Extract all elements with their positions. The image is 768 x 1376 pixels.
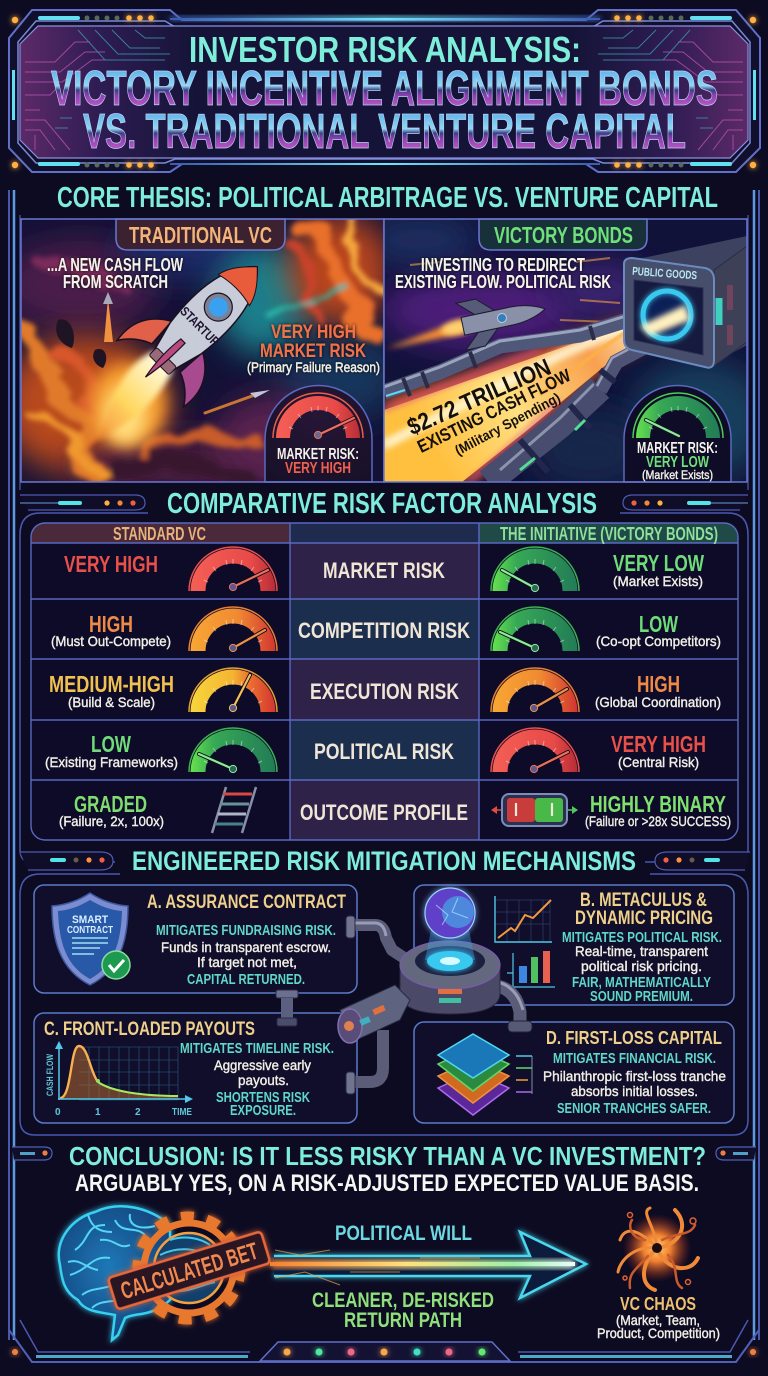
flow label: $2.72 TRILLION	[403, 354, 555, 441]
row: outcome profile: HIGHLY BINARY	[590, 791, 726, 817]
icon: brain and gear	[59, 1206, 270, 1340]
callout: very high market risk: VERY HIGH	[271, 322, 356, 343]
row: political risk: (Existing Frameworks)	[45, 754, 178, 770]
crystal globe	[425, 888, 475, 938]
chart: cash flow over time: CASH FLOW	[45, 1054, 56, 1096]
card A: assurance contract: If target not met,	[197, 954, 297, 970]
heading: engineered risk mitigation: ENGINEERED RISK MITIGATION MECHANISMS	[132, 846, 636, 876]
central machine with pipes	[276, 888, 532, 1094]
icon: VC chaos swirl	[618, 1208, 698, 1290]
label: VC chaos: Product, Competition)	[597, 1325, 720, 1341]
row: competition risk: LOW	[639, 611, 678, 637]
card C: front-loaded payouts	[34, 1013, 357, 1123]
row: political risk: (Central Risk)	[618, 754, 699, 770]
row: market risk: VERY LOW	[613, 550, 704, 576]
small rocket	[386, 298, 546, 352]
panel: traditional VC	[20, 218, 385, 483]
card C: front-loaded payouts: payouts.	[238, 1072, 289, 1088]
panel: victory bonds: PUBLIC GOODS	[632, 266, 698, 282]
row: execution risk: (Build & Scale)	[68, 694, 155, 710]
card D: first-loss capital	[414, 1022, 734, 1123]
tab: traditional VC: TRADITIONAL VC	[129, 222, 272, 248]
row: political risk: POLITICAL RISK	[314, 739, 454, 764]
icon: smart contract shield	[52, 893, 130, 985]
row: political risk	[45, 728, 706, 773]
row: competition risk: COMPETITION RISK	[298, 618, 470, 643]
card C: front-loaded payouts: Aggressive early	[214, 1057, 311, 1073]
card B: metaculus and dynamic pricing: FAIR, MATHEMATICALLY	[572, 975, 711, 991]
row: outcome profile: OUTCOME PROFILE	[300, 800, 468, 825]
card A: assurance contract: CAPITAL RETURNED.	[187, 971, 305, 988]
label: VC chaos	[597, 1294, 720, 1341]
row: outcome profile: GRADED	[74, 791, 147, 817]
gauge panel: market risk very high	[265, 386, 372, 482]
card C: front-loaded payouts: MITIGATES TIMELINE RISK.	[180, 1040, 334, 1057]
barrel	[340, 985, 410, 1042]
card A: assurance contract	[34, 885, 357, 993]
label: cleaner return path: CLEANER, DE-RISKED	[312, 1289, 494, 1312]
label: VC chaos: (Market, Team,	[616, 1312, 700, 1328]
table: comparative risk factors	[31, 523, 738, 840]
gear	[137, 1216, 241, 1320]
row: market risk: MARKET RISK	[323, 558, 445, 583]
card B: metaculus and dynamic pricing: B. METACULUS &	[580, 890, 707, 911]
footer frame with status lights	[9, 1320, 759, 1362]
card D: first-loss capital: D. FIRST-LOSS CAPITAL	[546, 1028, 722, 1048]
label: VC chaos: VC CHAOS	[620, 1294, 696, 1314]
row: execution risk	[49, 668, 721, 712]
portal block	[628, 236, 746, 352]
chart: cash flow over time: TIME	[172, 1107, 192, 1118]
card B: metaculus and dynamic pricing: MITIGATES POLITICAL RISK.	[562, 930, 722, 946]
row: market risk: VERY HIGH	[64, 551, 158, 577]
row: execution risk: EXECUTION RISK	[310, 679, 459, 704]
pipe: upper	[384, 314, 623, 399]
heading: comparative risk: COMPARATIVE RISK FACTOR ANALYSIS	[167, 488, 597, 520]
chart: small bars	[507, 951, 555, 987]
card D: first-loss capital: MITIGATES FINANCIAL RISK.	[553, 1051, 716, 1067]
label: cleaner return path	[312, 1289, 494, 1332]
row: execution risk: MEDIUM-HIGH	[49, 671, 174, 697]
side connector: conclusion	[12, 1147, 756, 1160]
tab: victory bonds	[479, 219, 647, 250]
card D: first-loss capital: absorbs initial losses.	[571, 1083, 698, 1099]
row: execution risk: HIGH	[637, 671, 680, 697]
label: calculated bet	[108, 1231, 270, 1310]
flow label: (Military Spending)	[452, 389, 563, 458]
card C: front-loaded payouts: C. FRONT-LOADED PAYOUTS	[44, 1019, 255, 1040]
text: new cash flow	[47, 255, 183, 292]
text: redirect existing flow: EXISTING FLOW. POLITICAL RISK	[395, 272, 611, 292]
pipes	[350, 923, 523, 1082]
text: new cash flow: ...A NEW CASH FLOW	[47, 255, 183, 275]
column header: standard VC: STANDARD VC	[113, 524, 206, 544]
row: competition risk: HIGH	[89, 611, 133, 637]
gauge panel: market risk very low: VERY LOW	[646, 454, 709, 471]
card B: metaculus and dynamic pricing: political risk pricing.	[581, 958, 702, 974]
text: new cash flow: FROM SCRATCH	[63, 272, 168, 292]
tab: victory bonds: VICTORY BONDS	[494, 222, 633, 248]
row: execution risk: (Global Coordination)	[595, 694, 721, 710]
label: calculated bet: CALCULATED BET	[118, 1238, 261, 1305]
connector: vertical coupling	[276, 990, 298, 1026]
rocket: STARTUP	[177, 304, 223, 349]
comparative section frame	[20, 513, 748, 862]
card B: metaculus and dynamic pricing: Real-time, transparent	[575, 943, 708, 959]
header banner	[9, 10, 760, 172]
side connector: mechanisms section	[20, 852, 750, 870]
card A: assurance contract: MITIGATES FUNDRAISING RISK.	[156, 922, 336, 939]
row: competition risk: (Must Out-Compete)	[51, 633, 171, 649]
card A: assurance contract: A. ASSURANCE CONTRACT	[147, 892, 346, 913]
gauge panel: market risk very high: MARKET RISK:	[277, 446, 359, 463]
card B: metaculus and dynamic pricing: SOUND PREMIUM.	[590, 989, 693, 1005]
card B: metaculus and dynamic pricing	[414, 885, 734, 1005]
row: political risk: VERY HIGH	[611, 731, 706, 757]
row: political risk: LOW	[91, 731, 131, 757]
title	[51, 29, 718, 159]
label: cleaner return path: RETURN PATH	[344, 1309, 462, 1332]
icon: smart contract shield: SMART	[72, 914, 108, 926]
row: market risk: (Market Exists)	[613, 573, 703, 589]
card D: first-loss capital: SENIOR TRANCHES SAFER.	[557, 1100, 711, 1117]
brain	[59, 1206, 170, 1340]
icon: smart contract shield: CONTRACT	[67, 925, 113, 936]
gauge panel: market risk very high: VERY HIGH	[285, 460, 351, 477]
callout: very high market risk: (Primary Failure Reason)	[247, 360, 380, 375]
row: outcome profile	[59, 787, 731, 833]
tab: traditional VC	[116, 219, 285, 250]
title: INVESTOR RISK ANALYSIS:	[189, 29, 581, 70]
text: redirect existing flow: INVESTING TO REDIRECT	[421, 255, 585, 275]
mechanisms section frame	[20, 874, 748, 1135]
chart: cash flow over time: 1	[95, 1107, 101, 1118]
card C: front-loaded payouts: EXPOSURE.	[230, 1102, 296, 1119]
chart: rising line	[495, 896, 552, 942]
panel: victory bonds	[383, 218, 748, 483]
machine hub	[400, 965, 500, 1014]
icon: tranche stack	[438, 1034, 532, 1115]
chart: cash flow over time: 0	[55, 1107, 61, 1118]
label: political will: POLITICAL WILL	[335, 1222, 472, 1245]
chart: cash flow over time	[45, 1041, 193, 1118]
gauge panel: market risk very low: MARKET RISK:	[637, 440, 718, 457]
side connector: comparative section	[20, 495, 748, 510]
heading: conclusion	[69, 1141, 706, 1197]
row: outcome profile: (Failure, 2x, 100x)	[59, 813, 164, 829]
card A: assurance contract: Funds in transparent escrow.	[161, 939, 331, 955]
pipe: lower	[480, 348, 646, 482]
card B: metaculus and dynamic pricing: DYNAMIC PRICING	[575, 908, 713, 929]
row: competition risk: (Co-opt Competitors)	[596, 633, 721, 649]
chart: cash flow over time: 2	[135, 1107, 141, 1118]
text: redirect existing flow	[395, 255, 611, 292]
gauge panel: market risk very low: (Market Exists)	[642, 470, 713, 482]
gauge panel: market risk very low	[624, 386, 731, 482]
card C: front-loaded payouts: SHORTENS RISK	[216, 1089, 310, 1106]
card D: first-loss capital: Philanthropic first-loss tranche	[543, 1068, 726, 1084]
row: competition risk	[51, 607, 721, 652]
arrow: return path	[270, 1232, 586, 1298]
flow label: EXISTING CASH FLOW	[414, 365, 574, 457]
row: outcome profile: (Failure or >28x SUCCESS)	[585, 813, 731, 829]
rocket	[56, 233, 291, 468]
row: market risk	[64, 547, 704, 592]
callout: very high market risk: MARKET RISK	[260, 341, 366, 362]
callout: very high market risk	[247, 322, 380, 375]
